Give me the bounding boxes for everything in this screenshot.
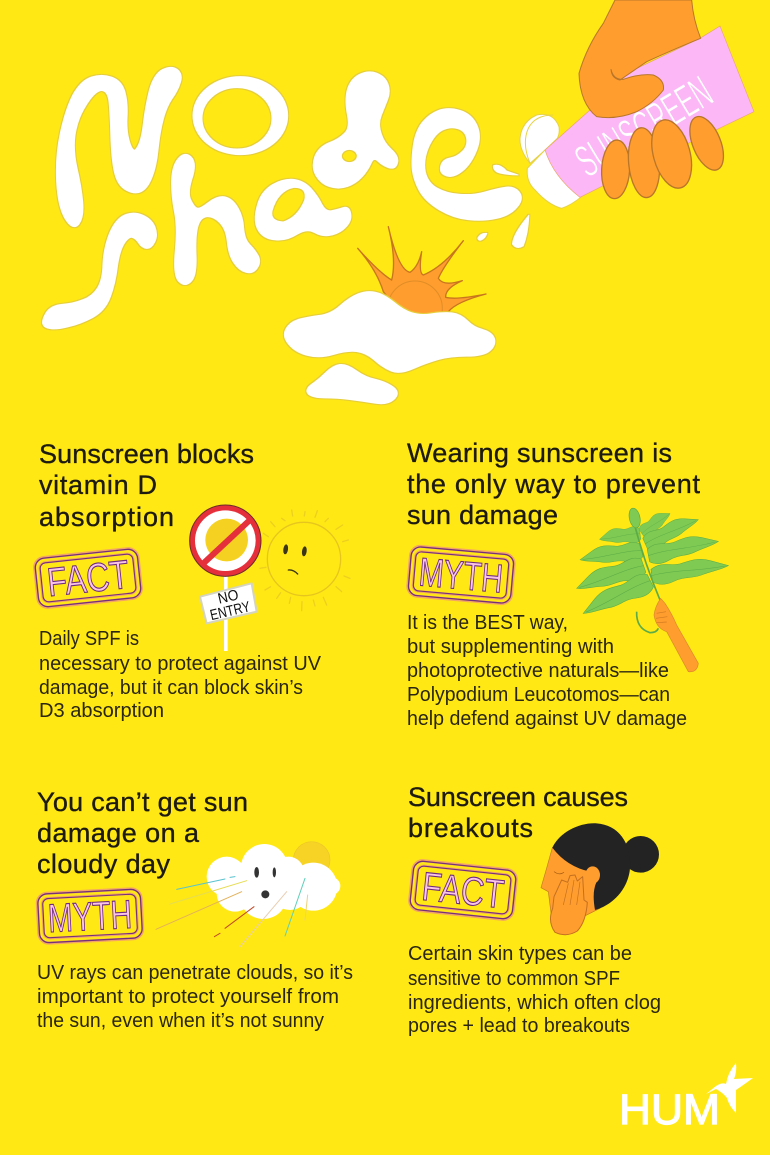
heading: absorption: [39, 502, 174, 532]
body text: [37, 962, 353, 1032]
heading: the only way to prevent: [407, 469, 700, 499]
body text: D3 absorption: [39, 700, 164, 722]
illustration: sun behind clouds: [286, 227, 494, 403]
icon: no entry sign: ENTRY: [208, 598, 252, 624]
icon: fern in hand: [573, 507, 730, 672]
panel: cloudy day myth: [37, 787, 353, 1032]
letter S: [44, 214, 155, 328]
body text: damage, but it can block skin’s: [39, 677, 303, 699]
letter D: [315, 73, 397, 187]
icon: no entry sign: NO: [216, 586, 240, 608]
stamp: fact: FACT: [45, 553, 131, 605]
heading: vitamin D: [39, 470, 157, 500]
body text: [408, 943, 661, 1037]
body text: important to protect yourself from: [37, 986, 339, 1008]
body text: necessary to protect against UV: [39, 653, 322, 675]
logo: HUM hummingbird: [619, 1063, 753, 1134]
body text: ingredients, which often clog: [408, 992, 661, 1014]
heading: Wearing sunscreen is: [407, 438, 672, 468]
body text: but supplementing with: [407, 636, 614, 658]
icon: no entry sign: [190, 505, 261, 651]
heading: You can’t get sun: [37, 787, 248, 817]
heading: Sunscreen blocks: [39, 439, 254, 469]
icon: surprised cloud with UV rays: [156, 842, 340, 947]
stamp: myth: MYTH: [47, 893, 133, 941]
heading: Sunscreen causes: [408, 782, 628, 812]
panel: breakouts fact: [408, 782, 661, 1037]
body text: Polypodium Leucotomos—can: [407, 684, 670, 706]
letter A: [257, 181, 350, 239]
letter N: [58, 69, 180, 225]
heading: cloudy day: [37, 849, 170, 879]
icon: woman holding face: [541, 823, 659, 935]
panel: vitamin D fact: [34, 439, 350, 722]
clouds: [286, 293, 494, 403]
body text: UV rays can penetrate clouds, so it’s: [37, 962, 353, 984]
stamp: fact: FACT: [420, 865, 506, 917]
body text: the sun, even when it’s not sunny: [37, 1010, 324, 1032]
heading: [407, 438, 700, 530]
sun rays: [358, 227, 486, 317]
letter E: [413, 110, 520, 219]
small cloud: [308, 366, 396, 403]
panel: sun damage myth: [407, 438, 730, 730]
tube body: [545, 26, 754, 197]
body text: Daily SPF is: [39, 628, 139, 650]
title lettering: No Shade: [44, 69, 529, 328]
body text: It is the BEST way,: [407, 612, 568, 634]
illustration: hand squeezing sunscreen tube: [520, 0, 754, 208]
sun disc: [388, 281, 442, 336]
hand and thumb: [579, 0, 701, 118]
logo: HUM hummingbird: HUM: [619, 1086, 720, 1134]
body text: Certain skin types can be: [408, 943, 632, 965]
heading: [37, 787, 248, 879]
tube lid: [520, 114, 559, 163]
fingers: [600, 112, 730, 199]
body text: [39, 628, 322, 722]
heading: breakouts: [408, 813, 533, 843]
body text: help defend against UV damage: [407, 708, 687, 730]
body text: pores + lead to breakouts: [408, 1015, 630, 1037]
heading: sun damage: [407, 500, 558, 530]
body text: sensitive to common SPF: [408, 968, 620, 990]
letter H: [173, 156, 258, 283]
heading: [408, 782, 628, 843]
letter O: [194, 78, 286, 153]
tube cap: [527, 150, 582, 208]
body text: photoprotective naturals—like: [407, 660, 669, 682]
sunscreen droplets: [478, 165, 529, 248]
heading: [39, 439, 254, 532]
heading: damage on a: [37, 818, 200, 848]
icon: sad sun: [260, 510, 350, 611]
stamp: myth: MYTH: [417, 550, 505, 602]
body text: [407, 612, 687, 730]
large cloud: [286, 293, 494, 371]
